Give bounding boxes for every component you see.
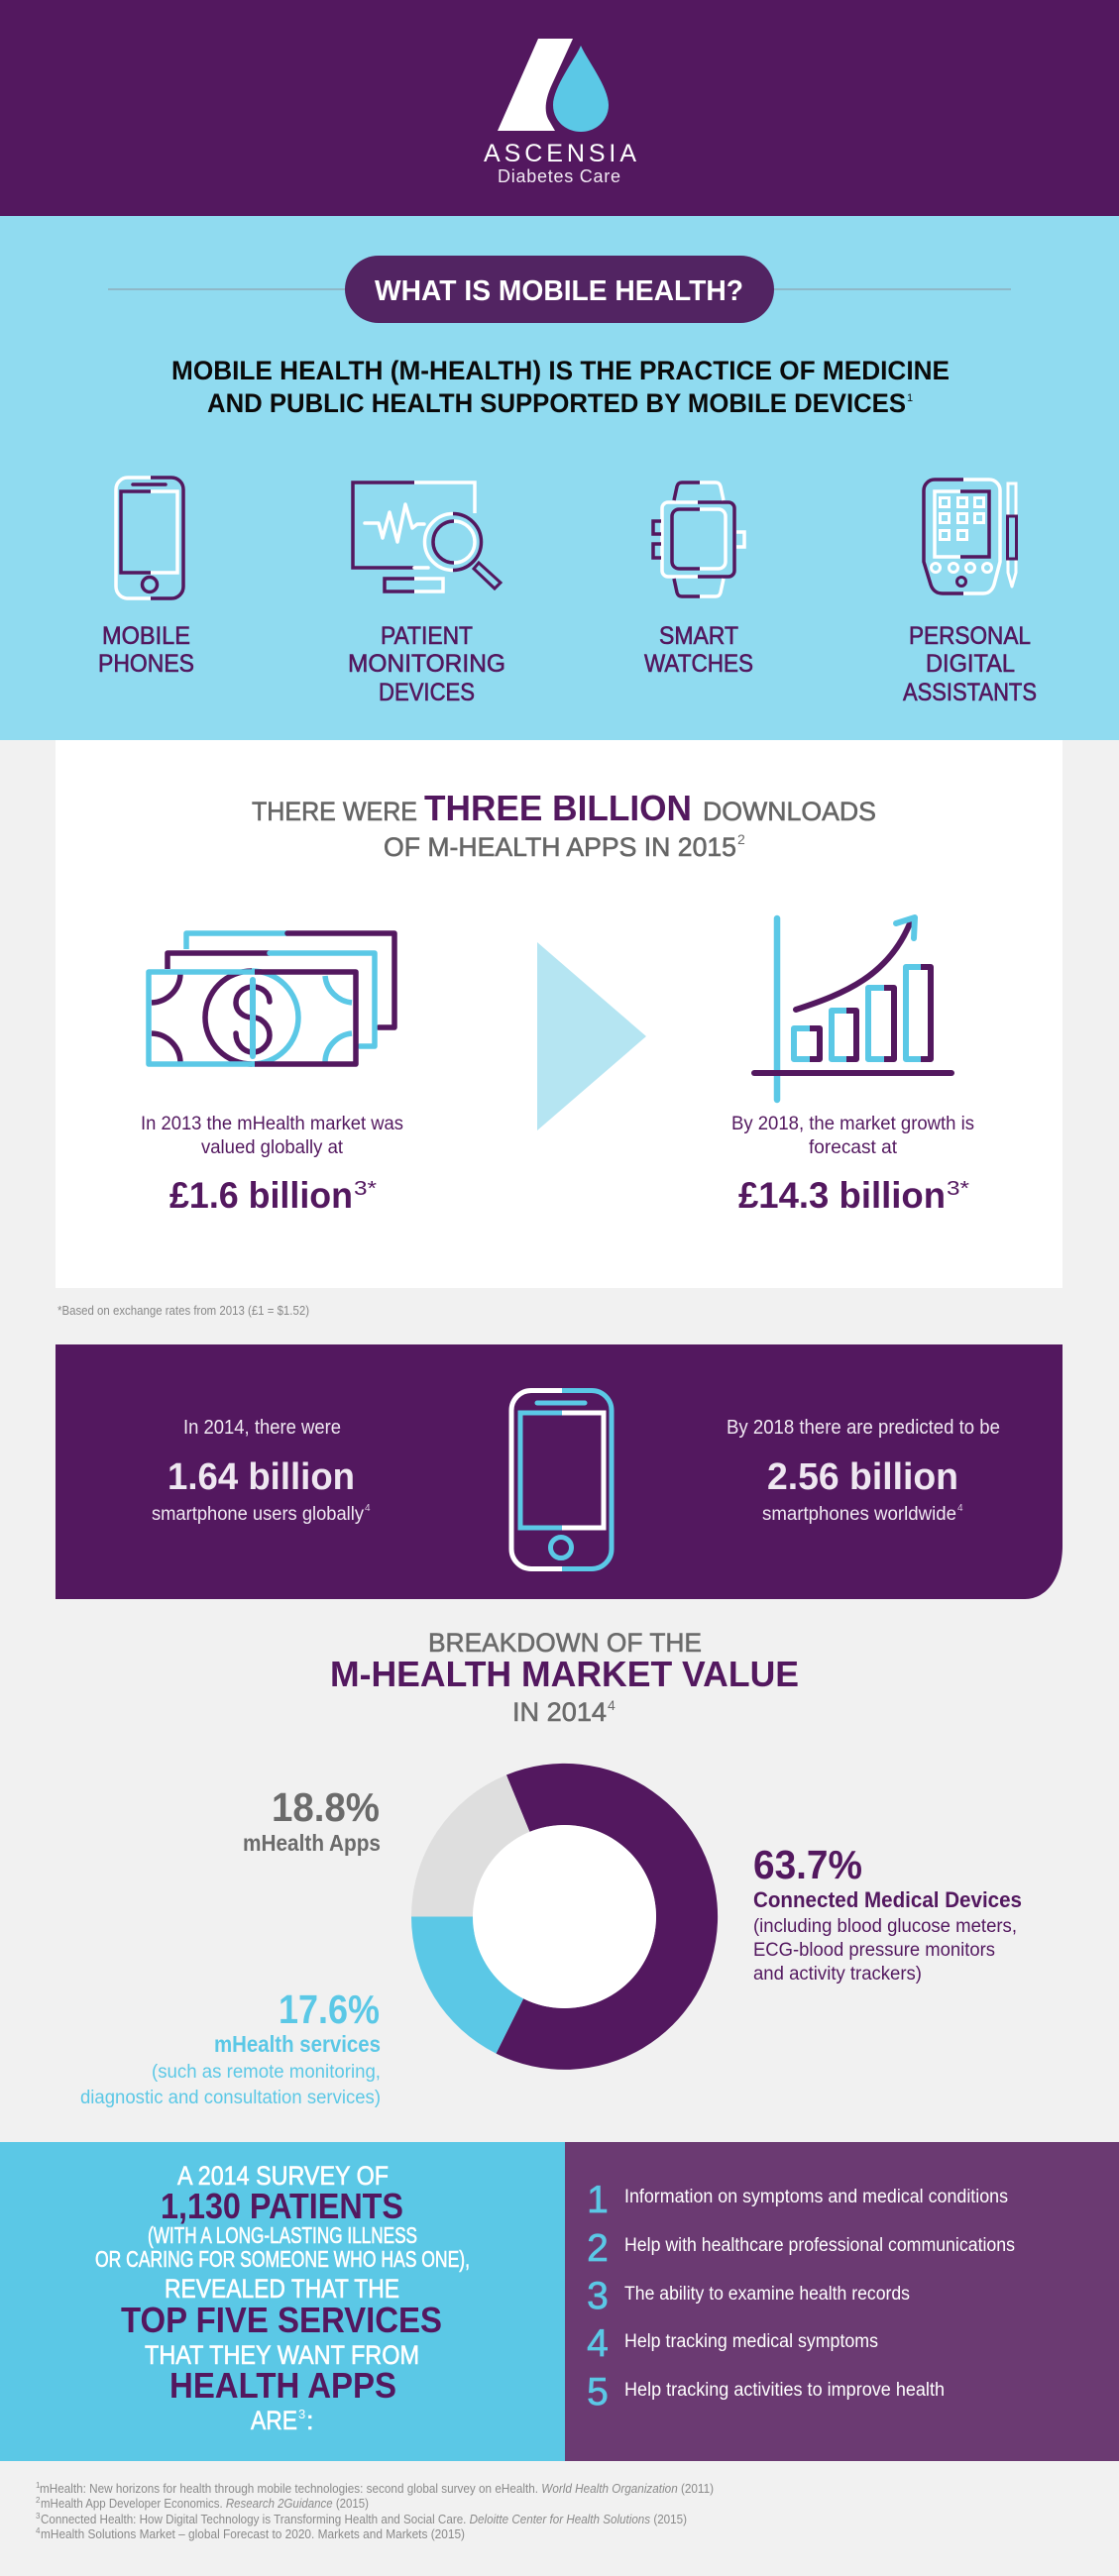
- text: 2013 market value: £1.6 billion: [169, 1175, 353, 1216]
- list item 5: 5: [587, 2371, 609, 2414]
- callout: mHealth services share: mHealth services: [214, 2031, 381, 2057]
- section heading: [252, 788, 876, 862]
- icon: smart watch: [653, 483, 744, 596]
- list item 4: [587, 2322, 878, 2365]
- callout: mHealth services share: 17.6%: [279, 1986, 380, 2032]
- definition text: [171, 356, 950, 418]
- icon: smartphone: [511, 1391, 612, 1569]
- text: 2018 market forecast: [731, 1114, 974, 1216]
- label: patient monitoring devices: [348, 622, 505, 706]
- section heading: DOWNLOADS: [703, 797, 876, 826]
- references: mHealth Solutions Market – global Forecast to 2020. Markets and Markets (2015): [41, 2526, 465, 2541]
- references: 1: [36, 2481, 41, 2490]
- text: 2018 smartphones: smartphones worldwide: [762, 1504, 956, 1525]
- text: 2013 market value: [141, 1114, 403, 1216]
- list item 2: [587, 2227, 1015, 2270]
- panel: three billion downloads: [56, 740, 1063, 1288]
- footnote: exchange rate: *Based on exchange rates from 2013 (£1 = $1.52): [57, 1303, 309, 1318]
- callout: connected medical devices share: ECG-blood pressure monitors: [753, 1940, 995, 1961]
- list item 5: [587, 2371, 945, 2414]
- icon: growth bar chart: [754, 917, 951, 1100]
- section heading: THREE BILLION: [424, 788, 692, 828]
- panel: survey summary: REVEALED THAT THE: [165, 2274, 399, 2304]
- icon: patient monitor with magnifier: [353, 483, 501, 591]
- icon: banknotes: [149, 933, 394, 1064]
- logo: Ascensia mark: [498, 39, 609, 132]
- references: [36, 2481, 714, 2541]
- panel: survey summary: A 2014 SURVEY OF: [177, 2161, 389, 2191]
- heading: market value breakdown: M-HEALTH MARKET VALUE: [330, 1654, 799, 1694]
- text: 2018 smartphones: [727, 1417, 1000, 1525]
- label: patient monitoring devices: PATIENT: [381, 622, 473, 650]
- callout: connected medical devices share: [753, 1842, 1022, 1985]
- list item 5: Help tracking activities to improve health: [624, 2380, 945, 2401]
- text: 2018 smartphones: 4: [957, 1503, 963, 1514]
- list item 2: 2: [587, 2227, 609, 2270]
- text: 2014 smartphone users: smartphone users globally: [152, 1504, 364, 1525]
- chart: donut of market value: [411, 1764, 718, 2070]
- heading: market value breakdown: 4: [608, 1697, 615, 1713]
- label: smart watches: SMART: [659, 622, 738, 650]
- label: smart watches: [644, 622, 753, 678]
- callout: mHealth apps share: [243, 1784, 381, 1856]
- heading: market value breakdown: IN 2014: [512, 1697, 607, 1727]
- callout: connected medical devices share: and activity trackers): [753, 1964, 922, 1985]
- label: mobile phones: [98, 622, 194, 678]
- heading pill: WHAT IS MOBILE HEALTH?: [375, 275, 743, 307]
- text: 2018 smartphones: 2.56 billion: [767, 1456, 958, 1498]
- definition text: 1: [907, 392, 913, 404]
- panel: survey summary: HEALTH APPS: [169, 2365, 396, 2406]
- text: 2018 market forecast: forecast at: [809, 1137, 898, 1158]
- references: 3: [36, 2512, 41, 2521]
- definition text: MOBILE HEALTH (M-HEALTH) IS THE PRACTICE OF MEDICINE: [171, 356, 950, 385]
- label: patient monitoring devices: MONITORING: [348, 650, 505, 678]
- text: 2014 smartphone users: 4: [365, 1503, 371, 1514]
- list item 1: Information on symptoms and medical conditions: [624, 2187, 1008, 2207]
- panel: survey summary: THAT THEY WANT FROM: [145, 2340, 419, 2370]
- text: 2018 smartphones: By 2018 there are predicted to be: [727, 1417, 1000, 1439]
- panel: top five services list: [565, 2142, 1119, 2461]
- text: 2013 market value: In 2013 the mHealth market was: [141, 1114, 403, 1134]
- text: 2013 market value: valued globally at: [201, 1137, 344, 1158]
- label: personal digital assistants: [903, 622, 1037, 706]
- text: 2018 market forecast: £14.3 billion: [738, 1175, 946, 1216]
- references: 2: [36, 2496, 41, 2505]
- text: 2014 smartphone users: [152, 1417, 371, 1525]
- list item 3: The ability to examine health records: [624, 2284, 910, 2305]
- panel: survey summary: TOP FIVE SERVICES: [121, 2300, 442, 2340]
- panel: smartphone users: [56, 1344, 1063, 1599]
- references: 4: [36, 2526, 41, 2535]
- panel: survey summary: ARE: [251, 2406, 297, 2435]
- arrow: triangle pointing right: [537, 942, 646, 1130]
- list item 3: [587, 2275, 910, 2317]
- heading: market value breakdown: [330, 1628, 799, 1727]
- label: mobile phones: PHONES: [98, 650, 194, 678]
- callout: mHealth apps share: mHealth Apps: [243, 1830, 381, 1856]
- icon: personal digital assistant: [924, 480, 1017, 593]
- list item 1: 1: [587, 2179, 609, 2221]
- callout: connected medical devices share: Connected Medical Devices: [753, 1887, 1022, 1912]
- label: personal digital assistants: ASSISTANTS: [903, 679, 1037, 706]
- callout: mHealth services share: diagnostic and consultation services): [80, 2088, 381, 2108]
- section heading: 2: [737, 831, 745, 847]
- panel: survey summary: 1,130 PATIENTS: [161, 2186, 403, 2226]
- brand name: ASCENSIA: [484, 140, 636, 167]
- label: personal digital assistants: DIGITAL: [926, 650, 1015, 678]
- text: 2018 market forecast: 3*: [947, 1178, 969, 1200]
- panel: survey summary: 3: [298, 2407, 305, 2421]
- panel: what is mobile health: [0, 216, 1119, 740]
- list item 4: 4: [587, 2322, 609, 2365]
- header band with logo: [0, 0, 1119, 216]
- panel: survey summary: :: [306, 2406, 314, 2435]
- text: 2018 market forecast: By 2018, the market growth is: [731, 1114, 974, 1134]
- callout: connected medical devices share: 63.7%: [753, 1842, 862, 1887]
- label: mobile phones: MOBILE: [102, 622, 190, 650]
- icon: mobile phone: [116, 478, 183, 598]
- section heading: THERE WERE: [252, 797, 417, 826]
- brand tagline: Diabetes Care: [498, 166, 620, 186]
- callout: mHealth services share: [80, 1986, 381, 2108]
- section heading: OF M-HEALTH APPS IN 2015: [384, 832, 736, 862]
- list item 4: Help tracking medical symptoms: [624, 2331, 878, 2352]
- list item 3: 3: [587, 2275, 609, 2317]
- label: personal digital assistants: PERSONAL: [909, 622, 1031, 650]
- references: mHealth App Developer Economics. Research 2Guidance (2015): [41, 2496, 369, 2511]
- text: 2014 smartphone users: 1.64 billion: [168, 1456, 355, 1498]
- references: mHealth: New horizons for health through mobile technologies: second global survey on eHealth. World Health Organization (2011): [40, 2481, 714, 2496]
- callout: connected medical devices share: (including blood glucose meters,: [753, 1916, 1017, 1937]
- references: Connected Health: How Digital Technology is Transforming Health and Social Care. Deloitte Center for Health Solutions (2015): [41, 2512, 687, 2526]
- list item 2: Help with healthcare professional communications: [624, 2235, 1015, 2256]
- list item 1: [587, 2179, 1008, 2221]
- panel: survey summary: [0, 2142, 565, 2461]
- definition text: AND PUBLIC HEALTH SUPPORTED BY MOBILE DEVICES: [207, 388, 906, 418]
- panel: survey summary: (WITH A LONG-LASTING ILLNESS: [148, 2222, 417, 2248]
- label: patient monitoring devices: DEVICES: [379, 679, 475, 706]
- callout: mHealth services share: (such as remote monitoring,: [152, 2062, 381, 2083]
- text: 2014 smartphone users: In 2014, there were: [183, 1417, 341, 1439]
- heading pill: [345, 256, 774, 323]
- text: 2013 market value: 3*: [354, 1178, 377, 1200]
- callout: mHealth apps share: 18.8%: [272, 1784, 380, 1830]
- label: smart watches: WATCHES: [644, 650, 753, 678]
- heading: market value breakdown: BREAKDOWN OF THE: [428, 1628, 702, 1658]
- panel: survey summary: OR CARING FOR SOMEONE WHO HAS ONE),: [95, 2246, 470, 2272]
